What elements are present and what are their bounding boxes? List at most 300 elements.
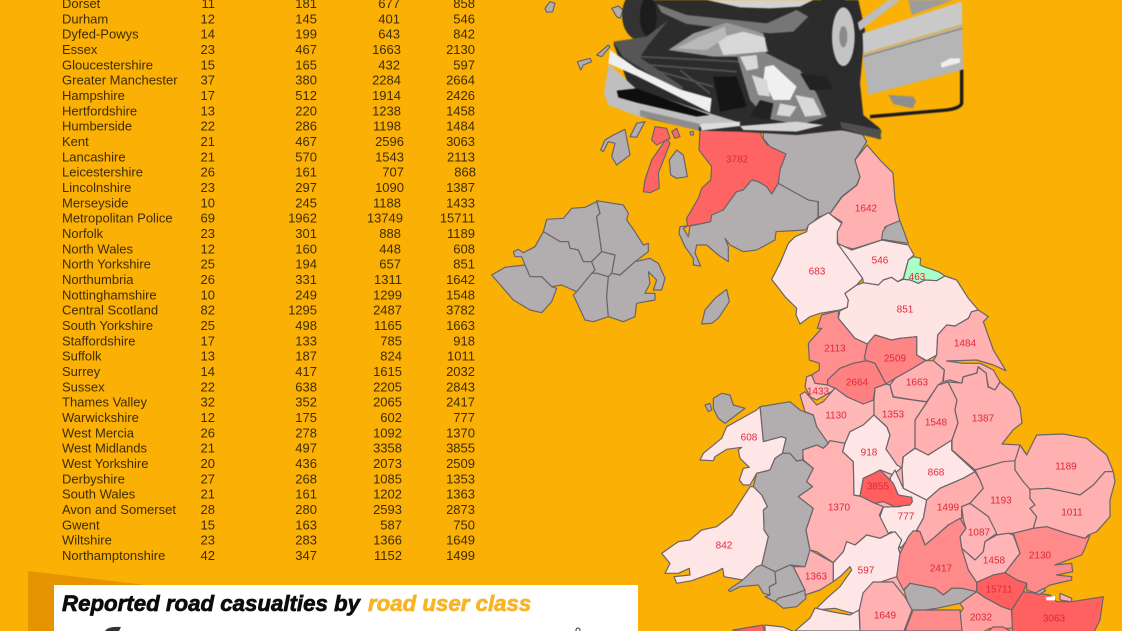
county: Hampshire <box>905 610 962 631</box>
table: casualties by police force: 26 <box>201 425 215 440</box>
door mirror <box>888 95 916 108</box>
table: casualties by police force: 194 <box>295 257 317 272</box>
bumper top shell <box>613 20 683 93</box>
table: casualties by police force: 1433 <box>446 195 475 210</box>
table: casualties by police force: 286 <box>295 119 317 134</box>
table: casualties by police force: 2284 <box>372 73 401 88</box>
county: Avon and Somerset <box>795 608 860 631</box>
counties: South Wales <box>728 565 806 608</box>
table: casualties by police force: West Mercia <box>62 425 135 440</box>
table: casualties by police force: Thames Valley <box>62 395 148 410</box>
Isle of Man <box>702 289 729 324</box>
table: casualties by police force: 824 <box>380 349 402 364</box>
region: grey Berkshire <box>904 583 977 612</box>
panel shadow <box>28 571 145 631</box>
table: casualties by police force: Lincolnshire <box>62 180 131 195</box>
wreck highlights <box>740 55 822 117</box>
county: Sussex <box>988 627 1012 631</box>
table: casualties by police force <box>62 0 476 563</box>
table: casualties by police force: 587 <box>380 517 402 532</box>
county: Cleveland <box>903 257 945 283</box>
table: casualties by police force: 175 <box>295 410 317 425</box>
county: Hertfordshire: 1458 <box>983 556 1006 566</box>
table: casualties by police force: 17 <box>201 88 215 103</box>
table: casualties by police force: 1189 <box>447 226 475 241</box>
door mirror frame <box>870 69 962 117</box>
Scottish islands <box>545 2 693 193</box>
bumper white band <box>608 50 712 113</box>
county: Tyne and Wear <box>882 221 908 243</box>
county: Thames Valley: 2417 <box>930 564 953 574</box>
table: casualties by police force: 851 <box>453 257 475 272</box>
region: Scottish borders <box>763 130 867 217</box>
table: casualties by police force: 643 <box>378 27 400 42</box>
county: Dyfed-Powys <box>662 487 768 583</box>
table: casualties by police force: 417 <box>295 364 317 379</box>
table: casualties by police force: 17 <box>201 333 215 348</box>
table: casualties by police force: 657 <box>379 257 401 272</box>
county: North Yorkshire <box>838 276 978 361</box>
table: casualties by police force: 21 <box>201 487 215 502</box>
county: Northumbria <box>828 145 900 249</box>
table: casualties by police force: 1543 <box>375 149 404 164</box>
table: casualties by police force: South Wales <box>62 487 136 502</box>
table: casualties by police force: 12 <box>201 241 215 256</box>
table: casualties by police force: Lancashire <box>62 149 126 164</box>
table: casualties by police force: 1366 <box>373 533 402 548</box>
table: casualties by police force: 268 <box>295 471 317 486</box>
county: Metropolitan Police: 15711 <box>985 584 1013 596</box>
table: casualties by police force: 1090 <box>375 180 404 195</box>
county: Wiltshire <box>859 582 912 631</box>
county: West Yorkshire: 2509 <box>884 354 907 364</box>
table: casualties by police force: 23 <box>201 533 215 548</box>
table: casualties by police force: 69 <box>201 211 215 226</box>
table: casualties by police force: North Wales <box>62 241 134 256</box>
table: casualties by police force: 777 <box>453 410 475 425</box>
table: casualties by police force: 1387 <box>446 180 475 195</box>
county: Merseyside <box>805 375 835 400</box>
county: West Midlands <box>860 470 912 507</box>
county: Cleveland: 463 <box>909 272 926 283</box>
table: casualties by police force: 163 <box>295 517 317 532</box>
county: South Yorkshire <box>890 361 944 402</box>
county: South Wales 1363: 1363 <box>805 572 828 582</box>
table: casualties by police force: 21 <box>201 441 215 456</box>
table: casualties by police force: 1962 <box>288 211 317 226</box>
table: casualties by police force: 21 <box>201 149 215 164</box>
table: casualties by police force: Staffordshire <box>62 333 135 348</box>
island: Anglesey <box>705 393 745 423</box>
estuary islands <box>1035 588 1072 602</box>
table: casualties by police force: West Yorkshire <box>62 456 148 471</box>
county: Clwyd <box>760 402 828 461</box>
table: casualties by police force: 2205 <box>373 379 402 394</box>
table: casualties by police force: Sussex <box>62 379 105 394</box>
icon: person head <box>576 628 580 631</box>
table: casualties by police force: West Midlands <box>62 441 148 456</box>
table: casualties by police force: 1188 <box>373 195 401 210</box>
county: Leicestershire: 868 <box>928 468 945 478</box>
county: Derbyshire <box>874 384 927 468</box>
table: casualties by police force: 1914 <box>372 88 401 103</box>
county: Essex: 2130 <box>1029 550 1052 562</box>
table: casualties by police force: 21 <box>201 134 215 149</box>
table: casualties by police force: 15 <box>201 57 215 72</box>
table: casualties by police force: 597 <box>453 57 475 72</box>
engine block <box>668 23 768 57</box>
table: casualties by police force: 12 <box>201 410 215 425</box>
table: casualties by police force: 347 <box>295 548 317 563</box>
door stripe <box>863 25 962 54</box>
table: casualties by police force: 13 <box>201 349 215 364</box>
county: North Wales <box>700 407 786 485</box>
door <box>863 2 963 95</box>
table: casualties by police force: Durham <box>62 11 108 26</box>
table: casualties by police force: 888 <box>379 226 401 241</box>
county: Warwickshire <box>880 470 927 548</box>
table: casualties by police force: 2130 <box>446 42 475 57</box>
county: Bedfordshire: 1087 <box>968 528 991 538</box>
county: West Midlands: 3855 <box>867 482 890 492</box>
table: casualties by police force: 1663 <box>372 42 401 57</box>
table: casualties by police force: 842 <box>453 27 475 42</box>
table: casualties by police force: 352 <box>295 395 317 410</box>
county: Bedfordshire <box>960 503 997 560</box>
county: Humberside <box>933 310 1006 390</box>
table: casualties by police force: 1295 <box>288 303 317 318</box>
county: West Mercia <box>798 441 890 563</box>
county: Cumbria <box>772 213 863 324</box>
table: casualties by police force: 1238 <box>372 103 401 118</box>
table: casualties by police force: Gloucestershire <box>62 57 153 72</box>
table: casualties by police force: 15 <box>201 517 215 532</box>
table: casualties by police force: 297 <box>295 180 317 195</box>
table: casualties by police force: 28 <box>201 502 215 517</box>
table: casualties by police force: 3063 <box>446 134 475 149</box>
table: casualties by police force: Humberside <box>62 119 132 134</box>
table: casualties by police force: 82 <box>201 303 215 318</box>
table: casualties by police force: 187 <box>295 349 317 364</box>
table: casualties by police force: 245 <box>295 195 317 210</box>
county: South Wales 1363 <box>793 550 833 595</box>
table: casualties by police force: 145 <box>295 11 317 26</box>
county: Dyfed-Powys: 842 <box>716 540 733 552</box>
table: casualties by police force: 1615 <box>373 364 402 379</box>
county: Devon <box>733 625 765 631</box>
table: casualties by police force: 2073 <box>373 456 402 471</box>
table: casualties by police force: 785 <box>380 333 402 348</box>
table: casualties by police force: 1085 <box>373 471 402 486</box>
table: casualties by police force: 280 <box>295 502 317 517</box>
table: casualties by police force: Metropolitan Police <box>62 211 173 226</box>
panel background <box>54 585 638 631</box>
county: Wiltshire: 1649 <box>874 610 897 622</box>
table: casualties by police force: 15711 <box>440 211 475 226</box>
table: casualties by police force: 22 <box>201 379 215 394</box>
right tyre <box>807 0 859 78</box>
table: casualties by police force: Derbyshire <box>62 471 125 486</box>
table: casualties by police force: 23 <box>201 180 215 195</box>
table: casualties by police force: 20 <box>201 456 215 471</box>
county: Greater Manchester <box>828 361 886 404</box>
icon: rider top <box>105 627 121 631</box>
table: casualties by police force: Wiltshire <box>62 533 112 548</box>
county: Thames Valley <box>896 518 977 595</box>
county: Gloucestershire <box>815 532 902 615</box>
table: casualties by police force: 1311 <box>374 272 402 287</box>
radiator <box>713 77 747 112</box>
table: casualties by police force: 165 <box>295 57 317 72</box>
table: casualties by police force: 436 <box>295 456 317 471</box>
table: casualties by police force: 1663 <box>446 318 475 333</box>
table: casualties by police force: 42 <box>201 548 215 563</box>
county: South Yorkshire: 1663 <box>906 378 929 388</box>
table: casualties by police force: 26 <box>201 165 215 180</box>
table: casualties by police force: 707 <box>382 165 404 180</box>
lower bumper trim <box>640 110 700 131</box>
table: casualties by police force: 1092 <box>373 425 402 440</box>
region: south-west Scotland <box>679 180 818 266</box>
table: casualties by police force: Northamptonshire <box>62 548 165 563</box>
table: casualties by police force: 2113 <box>447 149 475 164</box>
county: North Yorkshire: 851 <box>897 304 914 316</box>
county: Metropolitan Police <box>977 573 1027 610</box>
table: casualties by police force: 10 <box>201 195 215 210</box>
table: casualties by police force: 570 <box>295 149 317 164</box>
upper body panels <box>707 0 813 8</box>
table: casualties by police force: 2032 <box>446 364 475 379</box>
county: Lincolnshire <box>948 367 1027 470</box>
table: casualties by police force: North Yorkshire <box>62 257 151 272</box>
county: Nottinghamshire <box>915 382 958 455</box>
table: casualties by police force: 301 <box>295 226 317 241</box>
table: casualties by police force: 1011 <box>447 349 475 364</box>
table: casualties by police force: 380 <box>295 73 317 88</box>
crumpled hood <box>657 4 808 33</box>
table: casualties by police force: 10 <box>201 287 215 302</box>
county: Humberside: 1484 <box>954 338 977 350</box>
county: Hertfordshire <box>962 533 1020 582</box>
county: West Mercia: 1370 <box>828 502 851 514</box>
table: casualties by police force: 750 <box>453 517 475 532</box>
county: Staffordshire <box>843 415 902 496</box>
table: casualties by police force: 2873 <box>446 502 475 517</box>
table: casualties by police force: 2593 <box>373 502 402 517</box>
table: casualties by police force: Essex <box>62 42 98 57</box>
table: casualties by police force: 220 <box>295 103 317 118</box>
left tyre <box>622 0 657 40</box>
table: casualties by police force: 448 <box>379 241 401 256</box>
table: casualties by police force: Hampshire <box>62 88 125 103</box>
table: casualties by police force: 3358 <box>373 441 402 456</box>
table: casualties by police force: 918 <box>453 333 475 348</box>
table: casualties by police force: Greater Manchester <box>62 73 178 88</box>
bottom debris bar <box>840 122 882 139</box>
table: casualties by police force: 13749 <box>367 211 403 226</box>
table: casualties by police force: 467 <box>295 42 317 57</box>
county: Suffolk: 1011 <box>1061 508 1083 518</box>
table: casualties by police force: 32 <box>201 395 215 410</box>
county: Surrey <box>957 592 1012 631</box>
table: casualties by police force: 2487 <box>373 303 402 318</box>
county: Durham: 546 <box>872 256 889 266</box>
table: casualties by police force: 602 <box>380 410 402 425</box>
table: casualties by police force: Avon and Somerset <box>62 502 176 517</box>
table: casualties by police force: 27 <box>201 471 215 486</box>
table: casualties by police force: 498 <box>295 318 317 333</box>
image: overturned crashed car <box>604 0 963 139</box>
table: casualties by police force: 14 <box>201 27 215 42</box>
table: casualties by police force: Merseyside <box>62 195 128 210</box>
table: casualties by police force: 13 <box>201 103 215 118</box>
table: casualties by police force: 1363 <box>446 487 475 502</box>
panel heading: Reported road casualties by road user class <box>62 591 531 616</box>
county: Durham <box>837 240 914 285</box>
county: Cambridgeshire: 1193 <box>990 496 1012 506</box>
table: casualties by police force: 1370 <box>446 425 475 440</box>
table: casualties by police force: 160 <box>295 241 317 256</box>
table: casualties by police force: 1198 <box>373 119 401 134</box>
table: casualties by police force: 12 <box>201 11 215 26</box>
county: Merseyside: 1433 <box>807 386 830 398</box>
table: casualties by police force: 467 <box>295 134 317 149</box>
county: Northamptonshire <box>917 472 983 545</box>
county: Cumbria: 683 <box>809 266 826 278</box>
table: casualties by police force: 2843 <box>446 379 475 394</box>
table: casualties by police force: 278 <box>295 425 317 440</box>
door handle <box>941 58 960 68</box>
county: Northamptonshire: 1499 <box>937 502 960 514</box>
table: casualties by police force: Dyfed-Powys <box>62 27 139 42</box>
table: casualties by police force: 2509 <box>446 456 475 471</box>
table: casualties by police force: 161 <box>295 487 317 502</box>
table: casualties by police force: Hertfordshire <box>62 103 137 118</box>
table: casualties by police force: Nottinghamshire <box>62 287 157 302</box>
table: casualties by police force: Warwickshire <box>62 410 139 425</box>
table: casualties by police force: 23 <box>201 226 215 241</box>
county: Lancashire: 2113 <box>824 344 846 354</box>
county: Norfolk: 1189 <box>1055 462 1077 472</box>
county: Gloucestershire: 597 <box>858 566 875 576</box>
car underbody <box>613 0 881 139</box>
county: Somerset coast <box>765 625 795 631</box>
table: casualties by police force: 2426 <box>446 88 475 103</box>
table: casualties by police force: 283 <box>295 533 317 548</box>
table: casualties by police force: 14 <box>201 364 215 379</box>
county: Powys <box>753 453 813 572</box>
Northern Ireland <box>492 201 665 322</box>
table: casualties by police force: 23 <box>201 42 215 57</box>
county: Suffolk <box>1030 472 1115 538</box>
grille ribs <box>640 57 740 93</box>
bumper silver <box>604 50 740 127</box>
county: Cheshire: 1130 <box>825 410 847 422</box>
table: casualties by police force: 3782 <box>446 303 475 318</box>
table: casualties by police force: 2065 <box>373 395 402 410</box>
table: casualties by police force: 199 <box>295 27 317 42</box>
right wreckage <box>737 52 827 125</box>
table: casualties by police force: 161 <box>295 165 317 180</box>
county: Norfolk <box>1015 434 1113 495</box>
county: Central Scotland: 3782 <box>726 154 749 166</box>
table: casualties by police force: 3855 <box>446 441 475 456</box>
table: casualties by police force: 26 <box>201 272 215 287</box>
table: casualties by police force: Norfolk <box>62 226 104 241</box>
table: casualties by police force: 1499 <box>446 548 475 563</box>
table: casualties by police force: 133 <box>295 333 317 348</box>
table: casualties by police force: 1353 <box>446 471 475 486</box>
county: Leicestershire <box>902 440 975 500</box>
county: Central Scotland <box>687 130 786 226</box>
table: casualties by police force: 1642 <box>446 272 475 287</box>
table: casualties by police force: 25 <box>201 257 215 272</box>
table: casualties by police force: 25 <box>201 318 215 333</box>
wreck shadows <box>750 73 833 120</box>
table: casualties by police force: 37 <box>201 73 215 88</box>
table: casualties by police force: 497 <box>295 441 317 456</box>
table: casualties by police force: Gwent <box>62 517 100 532</box>
England interior underlay <box>810 375 1010 600</box>
table: casualties by police force: 2417 <box>446 395 475 410</box>
county: Lancashire <box>808 311 867 385</box>
table: casualties by police force: 608 <box>453 241 475 256</box>
table: casualties by police force: Northumbria <box>62 272 134 287</box>
county: Greater Manchester: 2664 <box>846 378 869 388</box>
table: casualties by police force: 1548 <box>446 287 475 302</box>
county: Kent: 3063 <box>1043 614 1066 624</box>
table: casualties by police force: 546 <box>453 11 475 26</box>
county: Northumbria: 1642 <box>855 204 878 214</box>
table: casualties by police force: 249 <box>295 287 317 302</box>
table: casualties by police force: 868 <box>454 165 476 180</box>
table: casualties by police force: 1458 <box>446 103 475 118</box>
county: Cambridgeshire <box>970 461 1037 535</box>
map of UK casualties <box>492 2 1115 631</box>
table: casualties by police force: 512 <box>295 88 317 103</box>
table: casualties by police force: 1152 <box>374 548 402 563</box>
county: Nottinghamshire: 1548 <box>925 418 948 428</box>
table: casualties by police force: 432 <box>378 57 400 72</box>
county: West Yorkshire <box>864 335 926 384</box>
table: casualties by police force: 401 <box>378 11 400 26</box>
county: North Wales: 608 <box>741 432 758 444</box>
county: Cheshire <box>800 388 874 445</box>
county: Essex <box>1005 527 1090 593</box>
table: casualties by police force: Kent <box>62 134 89 149</box>
table: casualties by police force: 2664 <box>446 73 475 88</box>
table: casualties by police force: 331 <box>295 272 317 287</box>
table: casualties by police force: Suffolk <box>62 349 102 364</box>
grille opening <box>617 88 710 117</box>
table: casualties by police force: 1202 <box>373 487 402 502</box>
panel: road user class <box>28 571 638 631</box>
county: Staffordshire: 918 <box>861 448 878 458</box>
table: casualties by police force: Central Scotland <box>62 303 158 318</box>
county: Derbyshire: 1353 <box>882 410 905 420</box>
table: casualties by police force: 22 <box>201 119 215 134</box>
county: Kent <box>1012 592 1103 631</box>
table: casualties by police force: Leicestershire <box>62 165 143 180</box>
table: casualties by police force: Surrey <box>62 364 101 379</box>
roof strips <box>857 0 953 31</box>
county: Surrey: 2032 <box>970 612 993 624</box>
county: Lincolnshire: 1387 <box>972 414 995 424</box>
table: casualties by police force: 1649 <box>446 533 475 548</box>
table: casualties by police force: 1165 <box>374 318 402 333</box>
county: Warwickshire: 777 <box>898 512 915 522</box>
washer bottle <box>763 65 797 100</box>
